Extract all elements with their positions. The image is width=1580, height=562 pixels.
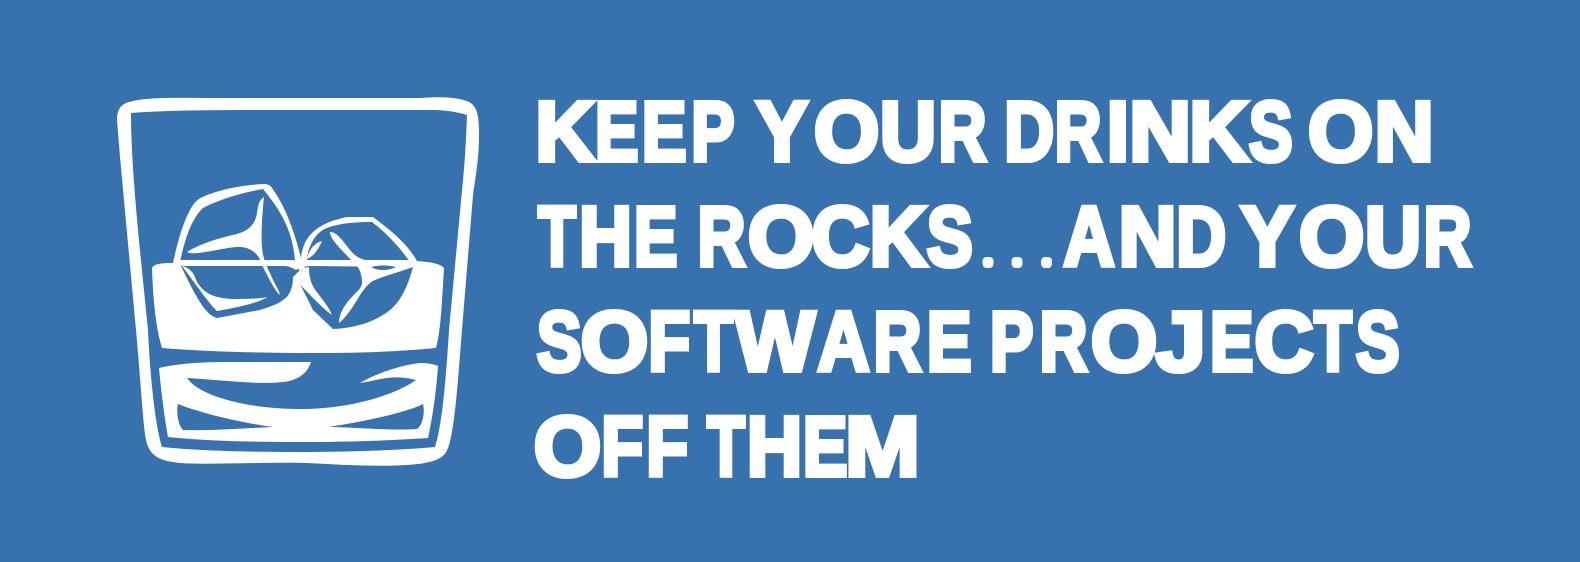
heading line 4: H	[747, 400, 802, 494]
heading line 1: O	[1308, 84, 1373, 178]
heading line 3: P	[990, 294, 1033, 388]
heading line 1: U	[880, 84, 936, 178]
ice highlight	[371, 266, 396, 270]
heading line 1: K	[535, 84, 595, 178]
heading line 3: F	[648, 294, 690, 388]
heading line 3: T	[1314, 294, 1352, 388]
heading line 2: O	[748, 190, 814, 284]
heading line 3: W	[735, 294, 816, 388]
heading line 2: K	[870, 190, 927, 284]
heading line 2: R	[698, 190, 746, 284]
heading line 2: S	[927, 190, 973, 284]
heading line 2: Y	[1241, 190, 1294, 284]
heading line 3: C	[1254, 294, 1314, 388]
heading line 2: T	[538, 190, 576, 284]
heading line 3: T	[694, 294, 733, 388]
heading line 1: Y	[756, 84, 808, 178]
heading line 2: R	[1424, 190, 1472, 284]
ice cube waterline	[173, 260, 414, 270]
heading line 2: U	[1365, 190, 1421, 284]
heading line 2: .	[1044, 247, 1049, 269]
heading line 4: M	[845, 400, 920, 494]
heading line 1: N	[1129, 84, 1191, 178]
heading line 4: O	[534, 400, 601, 494]
heading line 2: .	[1014, 247, 1020, 269]
heading line 3: S	[537, 294, 582, 388]
heading line 2: E	[634, 190, 677, 284]
heading line 1: K	[1189, 84, 1249, 178]
heading line 1: E	[642, 84, 686, 178]
heading line 2: .	[985, 247, 991, 269]
icon: whisky glass with ice cubes	[117, 97, 479, 466]
heading line 2: H	[579, 190, 632, 284]
ice cube inner edges	[182, 197, 413, 323]
heading line 1: I	[1107, 84, 1129, 178]
heading line 1: S	[1249, 84, 1293, 178]
heading: keep your drinks on the rocks and your software projects off them	[534, 84, 1472, 494]
heading line 4: F	[646, 400, 688, 494]
heading line 3: A	[818, 294, 870, 388]
heading line 1: R	[1055, 84, 1102, 178]
liquid base	[159, 362, 438, 442]
heading line 2: N	[1119, 190, 1176, 284]
heading line 4: E	[803, 400, 848, 494]
heading line 3: E	[927, 294, 972, 388]
heading line 3: O	[1091, 294, 1157, 388]
heading line 3: R	[1040, 294, 1088, 388]
heading line 1: E	[595, 84, 638, 178]
heading line 4: T	[707, 400, 745, 494]
heading line 1: N	[1374, 84, 1434, 178]
ice cube right faces	[298, 222, 413, 329]
glass outline	[117, 97, 479, 466]
liquid and ice silhouette	[152, 184, 444, 353]
ice cube left faces	[180, 189, 300, 318]
heading line 3: R	[874, 294, 922, 388]
heading line 2: A	[1064, 190, 1114, 284]
heading line 1: P	[691, 84, 733, 178]
heading line 2: C	[812, 190, 869, 284]
heading line 1: O	[814, 84, 879, 178]
heading line 3: S	[1356, 294, 1400, 388]
heading line 3: J	[1156, 294, 1206, 388]
heading line 3: E	[1210, 294, 1253, 388]
heading line 4: F	[601, 400, 643, 494]
heading line 1: R	[938, 84, 986, 178]
heading line 2: O	[1299, 190, 1364, 284]
heading line 3: O	[581, 294, 648, 388]
heading line 2: D	[1176, 190, 1226, 284]
heading line 1: D	[1004, 84, 1054, 178]
